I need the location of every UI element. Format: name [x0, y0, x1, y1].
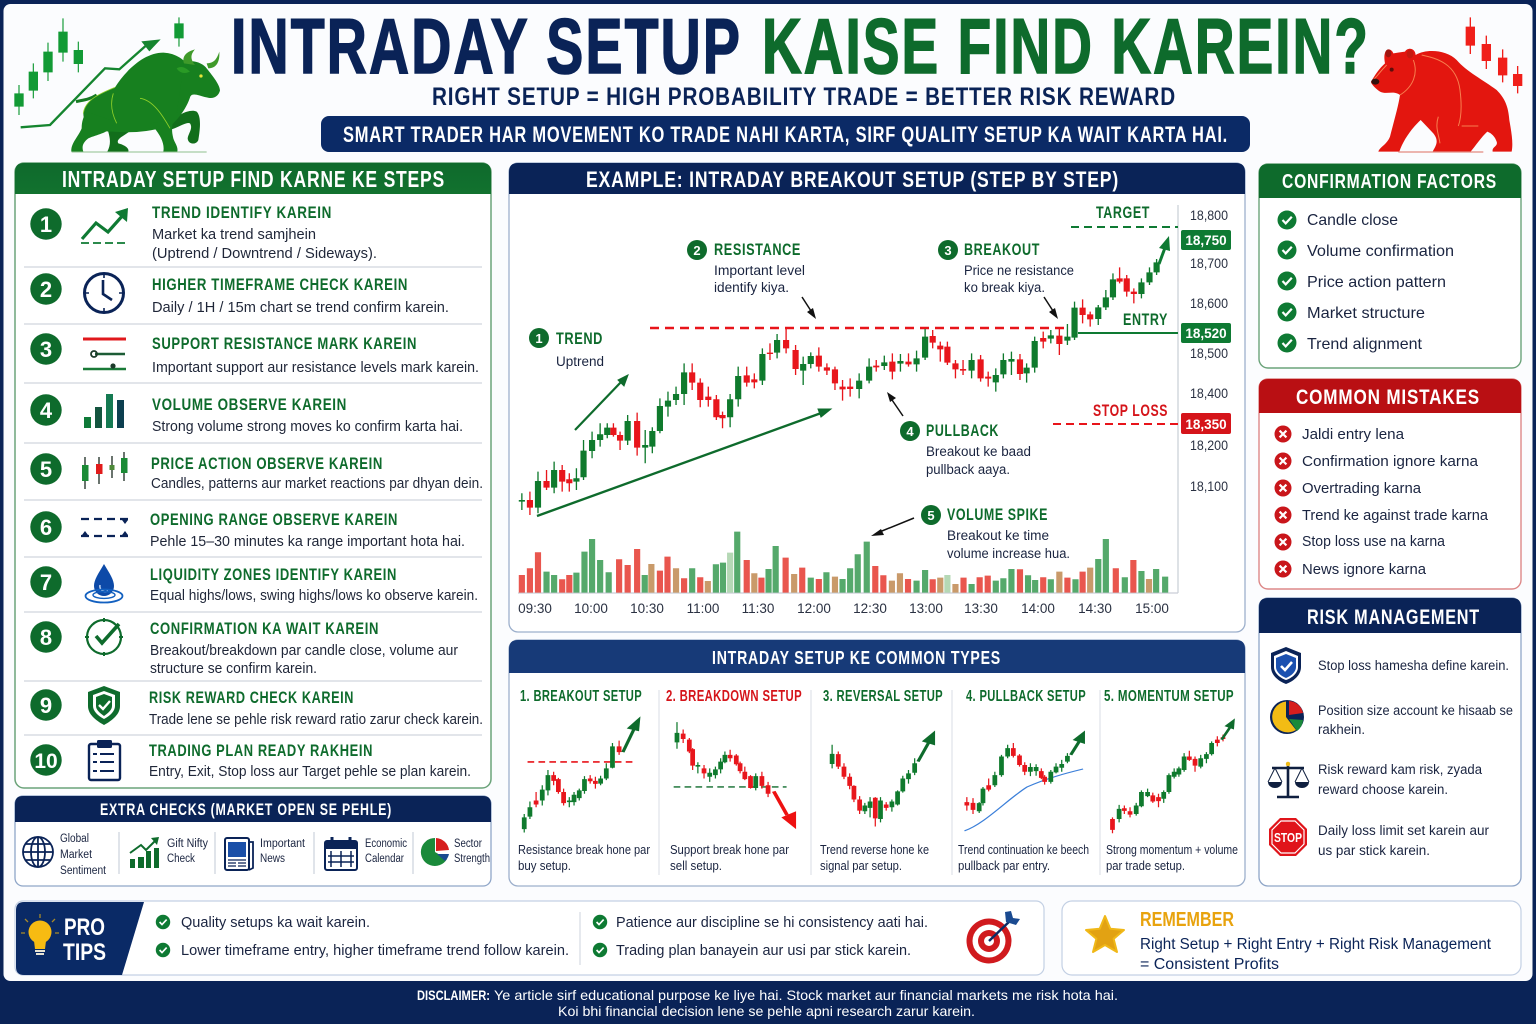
- mini chart: breakdown: [674, 722, 796, 829]
- callout 5: volume spike: 5: [927, 508, 935, 523]
- icon: candlesticks: [82, 452, 128, 489]
- callout 1: trend: [529, 328, 604, 369]
- setup 2: breakdown: 2. BREAKDOWN SETUP: [666, 688, 802, 705]
- setup 1: breakout: buy setup.: [518, 859, 571, 873]
- icon: confirmation check ring: [85, 618, 123, 656]
- list: confirmation items: Trend alignment: [1307, 336, 1423, 353]
- icon: gift nifty chart: [130, 837, 159, 868]
- price axis labels: 18,200: [1190, 438, 1228, 453]
- callout 3: breakout: 3: [944, 243, 952, 258]
- mini chart: pullback: [964, 731, 1085, 831]
- callout 1: trend: 1: [535, 331, 543, 346]
- heading: pro tips: [63, 914, 106, 966]
- step 6: Pehle 15–30 minutes ka range important hota hai.: [150, 534, 465, 550]
- icon: opening range dashes: [81, 519, 128, 536]
- price axis labels: 18,400: [1190, 386, 1228, 401]
- setup 1: breakout: [518, 688, 650, 873]
- step 5: [30, 452, 483, 492]
- text: risk reward: reward choose karein.: [1318, 782, 1448, 797]
- time axis labels: 11:00: [687, 601, 719, 616]
- text: global market sentiment: [60, 833, 107, 877]
- step 3: Important support aur resistance levels mark karein.: [152, 360, 479, 376]
- step 2: [30, 273, 449, 316]
- text: remember message: = Consistent Profits: [1140, 956, 1279, 973]
- text: risk reward: Risk reward kam risk, zyada: [1318, 762, 1482, 777]
- step 6: 6: [40, 515, 52, 540]
- heading: pro tips: PRO: [64, 914, 105, 941]
- price axis labels: 18,100: [1190, 479, 1228, 494]
- price axis labels: 18,800: [1190, 208, 1228, 223]
- time axis labels: 11:30: [742, 601, 774, 616]
- callout 2: resistance: [687, 240, 805, 295]
- step 9: RISK REWARD CHECK KAREIN: [149, 688, 354, 707]
- text: sector strength: [454, 838, 490, 865]
- panel: common setup types: [509, 640, 1245, 886]
- text: sector strength: Sector: [454, 838, 482, 850]
- disclaimer: Koi bhi financial decision lene se pehle apni research zarur karein.: [558, 1003, 975, 1019]
- setup 5: momentum: 5. MOMENTUM SETUP: [1104, 688, 1234, 705]
- icon: globe: [23, 837, 53, 867]
- heading: common types: INTRADAY SETUP KE COMMON TYPES: [712, 648, 1001, 668]
- callout 4: pullback: PULLBACK: [926, 421, 999, 440]
- arrow: to volume spike: [871, 518, 914, 536]
- icon: support and resistance lines: [83, 339, 126, 369]
- list: confirmation items: Price action pattern: [1307, 274, 1446, 291]
- tips list: left: Lower timeframe entry, higher timeframe trend follow karein.: [181, 943, 569, 959]
- step 1: (Uptrend / Downtrend / Sideways).: [152, 246, 377, 262]
- arrow: trend: [575, 375, 628, 430]
- panel: pro tips: [15, 901, 1044, 975]
- tips list: right: [593, 915, 928, 959]
- entry level: [1078, 310, 1231, 343]
- step 1: TREND IDENTIFY KAREIN: [152, 203, 332, 222]
- heading: common mistakes: COMMON MISTAKES: [1296, 386, 1480, 409]
- icon: gold star: [1086, 916, 1124, 952]
- step 7: 7: [40, 570, 52, 595]
- setup 4: pullback: pullback par entry.: [958, 859, 1050, 873]
- step 4: 4: [40, 398, 53, 423]
- setup 4: pullback: 4. PULLBACK SETUP: [966, 688, 1086, 705]
- callout 2: resistance: Important level: [714, 263, 805, 278]
- time axis labels: 15:00: [1135, 601, 1169, 616]
- step 3: SUPPORT RESISTANCE MARK KAREIN: [152, 334, 417, 353]
- icon: balance scale: [1268, 762, 1309, 797]
- candlestick chart: [522, 259, 1157, 515]
- step 6: OPENING RANGE OBSERVE KAREIN: [150, 510, 398, 529]
- icon: position size pie: [1270, 700, 1304, 734]
- list: mistakes: Stop loss use na karna: [1302, 534, 1446, 550]
- step 5: Candles, patterns aur market reactions par dhyan dein.: [151, 476, 483, 492]
- panel: breakout example chart: [509, 163, 1245, 632]
- text: daily loss limit: [1318, 823, 1489, 858]
- icon: target and dart: [966, 911, 1020, 964]
- text: daily loss limit: us par stick karein.: [1318, 843, 1430, 858]
- icon: sector pie: [421, 838, 449, 866]
- step 8: [30, 618, 458, 677]
- list: mistakes: News ignore karna: [1302, 562, 1427, 578]
- callout 4: pullback: 4: [906, 424, 914, 439]
- icon: stop sign: [1269, 818, 1307, 856]
- list: mistakes: Jaldi entry lena: [1302, 427, 1405, 443]
- step 4: VOLUME OBSERVE KAREIN: [152, 395, 347, 414]
- heading: remember: REMEMBER: [1140, 909, 1234, 931]
- step 7: LIQUIDITY ZONES IDENTIFY KAREIN: [150, 565, 397, 584]
- callout 5: volume spike: volume increase hua.: [947, 546, 1070, 561]
- text: economic calendar: [365, 838, 407, 865]
- callout 1: trend: TREND: [556, 329, 603, 348]
- list: mistakes: Confirmation ignore karna: [1302, 454, 1479, 470]
- time axis labels: 13:30: [964, 601, 998, 616]
- callout 3: breakout: [938, 240, 1074, 295]
- icon: water drop: [86, 564, 122, 602]
- setup 5: momentum: Strong momentum + volume: [1106, 843, 1238, 857]
- setup 3: reversal: [820, 688, 943, 873]
- time axis labels: 14:30: [1078, 601, 1112, 616]
- subtitle: RIGHT SETUP = HIGH PROBABILITY TRADE = BETTER RISK REWARD: [432, 83, 1176, 111]
- text: risk reward: [1318, 762, 1482, 797]
- callout 1: trend: Uptrend: [556, 354, 604, 369]
- text: stop loss: Stop loss hamesha define karein.: [1318, 658, 1509, 673]
- step 10: Entry, Exit, Stop loss aur Target pehle se plan karein.: [149, 764, 471, 780]
- list: confirmation items: [1278, 210, 1454, 353]
- text: position size: Position size account ke hisaab se: [1318, 703, 1513, 718]
- step 6: [30, 510, 465, 550]
- step 2: Daily / 1H / 15m chart se trend confirm karein.: [152, 300, 449, 316]
- text: global market sentiment: Sentiment: [60, 865, 107, 877]
- time axis labels: 10:30: [630, 601, 664, 616]
- step 9: 9: [40, 693, 52, 718]
- step 8: 8: [40, 625, 52, 650]
- heading: steps panel: INTRADAY SETUP FIND KARNE KE STEPS: [62, 166, 445, 192]
- callout 2: resistance: RESISTANCE: [714, 240, 801, 259]
- stop loss level: STOP LOSS: [1093, 401, 1168, 420]
- text: global market sentiment: Market: [60, 849, 93, 861]
- setup 3: reversal: Trend reverse hone ke: [820, 843, 929, 857]
- arrow: to target: [1159, 236, 1170, 264]
- step 1: 1: [40, 212, 52, 237]
- setup 4: pullback: [958, 688, 1089, 873]
- step 8: Breakout/breakdown par candle close, volume aur: [150, 643, 458, 659]
- step 4: Strong volume strong moves ko confirm karta hai.: [152, 419, 463, 435]
- setup 3: reversal: 3. REVERSAL SETUP: [823, 688, 943, 705]
- target level: [1071, 203, 1231, 250]
- time axis labels: 13:00: [909, 601, 943, 616]
- icon: green bull with rising candles: [19, 17, 220, 152]
- text: economic calendar: Economic: [365, 838, 407, 850]
- callout 3: breakout: BREAKOUT: [964, 240, 1040, 259]
- callout 2: resistance: identify kiya.: [714, 280, 789, 295]
- setup 5: momentum: par trade setup.: [1106, 859, 1185, 873]
- step 2: HIGHER TIMEFRAME CHECK KAREIN: [152, 275, 408, 294]
- mini chart: reversal: [832, 731, 935, 826]
- step 3: [30, 333, 479, 376]
- icon: volume bars: [84, 394, 124, 428]
- volume bars: [522, 532, 1165, 593]
- entry level: 18,520: [1185, 326, 1227, 341]
- step 9: [30, 686, 483, 728]
- icon: stop sign: STOP: [1274, 830, 1302, 845]
- disclaimer: DISCLAIMER:: [417, 988, 490, 1003]
- time axis labels: 12:00: [797, 601, 831, 616]
- icon: economic calendar: [325, 837, 357, 870]
- tips list: left: Quality setups ka wait karein.: [181, 915, 370, 931]
- time axis labels: 09:30: [518, 601, 552, 616]
- panel: common mistakes: [1259, 379, 1521, 589]
- list: mistakes: Overtrading karna: [1302, 481, 1422, 497]
- panel: remember: [1062, 901, 1521, 975]
- text: gift nifty check: [167, 838, 208, 865]
- setup 2: breakdown: sell setup.: [670, 859, 722, 873]
- text: remember message: [1140, 936, 1492, 973]
- heading: risk management: RISK MANAGEMENT: [1307, 606, 1480, 629]
- step 9: Trade lene se pehle risk reward ratio zarur check karein.: [149, 712, 483, 728]
- price axis labels: 18,500: [1190, 346, 1228, 361]
- step 8: structure se confirm karein.: [150, 661, 317, 677]
- icon: clock: [84, 274, 124, 312]
- step 1: Market ka trend samjhein: [152, 227, 316, 243]
- text: global market sentiment: Global: [60, 833, 89, 845]
- heading: pro tips: TIPS: [63, 939, 106, 966]
- icon: green shield: [88, 686, 120, 725]
- panel: extra checks: [15, 796, 491, 886]
- text: gift nifty check: Check: [167, 853, 195, 865]
- step 5: PRICE ACTION OBSERVE KAREIN: [151, 454, 383, 473]
- icon: uptrend arrow: [81, 208, 128, 243]
- step 3: 3: [40, 337, 52, 362]
- price axis labels: [1190, 208, 1228, 494]
- text: remember message: Right Setup + Right Entry + Right Risk Management: [1140, 936, 1492, 953]
- setup 2: breakdown: Support break hone par: [670, 843, 789, 857]
- list: mistakes: [1274, 426, 1489, 578]
- title: INTRADAY SETUP: [231, 2, 742, 90]
- step 10: 10: [34, 750, 58, 773]
- arrow: to resistance: [802, 297, 816, 319]
- callout 4: pullback: pullback aaya.: [926, 462, 1010, 477]
- setup 2: breakdown: [666, 688, 802, 873]
- text: important news: Important: [260, 838, 306, 850]
- target level: 18,750: [1185, 233, 1227, 248]
- arrow: trendline: [537, 409, 831, 516]
- text: important news: News: [260, 853, 285, 865]
- tips list: left: [156, 915, 569, 959]
- list: mistakes: Trend ke against trade karna: [1302, 508, 1489, 524]
- callout 2: resistance: 2: [693, 243, 701, 258]
- setup 4: pullback: Trend continuation ke beech: [958, 843, 1089, 857]
- tips list: right: Patience aur discipline se hi consistency aati hai.: [616, 915, 928, 931]
- step 10: [30, 740, 471, 780]
- step 1: [30, 203, 377, 262]
- resistance line: [650, 327, 1070, 329]
- icon: newspaper: [225, 838, 253, 870]
- icon: red bear with falling candles: [1371, 17, 1518, 152]
- entry level: ENTRY: [1123, 310, 1168, 329]
- panel: confirmation factors: [1259, 164, 1521, 368]
- setup 1: breakout: Resistance break hone par: [518, 843, 650, 857]
- setup 1: breakout: 1. BREAKOUT SETUP: [520, 688, 642, 705]
- list: confirmation items: Candle close: [1307, 212, 1398, 229]
- step 7: [30, 564, 478, 604]
- disclaimer: Ye article sirf educational purpose ke liye hai. Stock market aur financial markets me risk hota hai.: [494, 987, 1118, 1003]
- mini chart: breakout: [524, 716, 640, 833]
- callout 5: volume spike: [921, 505, 1070, 561]
- stop loss level: 18,350: [1185, 417, 1227, 432]
- callout 3: breakout: Price ne resistance: [964, 263, 1074, 278]
- price axis labels: 18,600: [1190, 296, 1228, 311]
- text: daily loss limit: Daily loss limit set karein aur: [1318, 823, 1489, 838]
- arrow: to pullback: [887, 392, 903, 416]
- step 4: [30, 394, 463, 435]
- callout 3: breakout: ko break kiya.: [964, 280, 1045, 295]
- mini chart: momentum: [1112, 718, 1235, 833]
- list: confirmation items: Volume confirmation: [1307, 243, 1454, 260]
- heading: example panel: EXAMPLE: INTRADAY BREAKOUT SETUP (STEP BY STEP): [586, 167, 1119, 192]
- stop loss level: [1053, 401, 1231, 434]
- setup 3: reversal: signal par setup.: [820, 859, 902, 873]
- list: confirmation items: Market structure: [1307, 305, 1425, 322]
- callout 5: volume spike: VOLUME SPIKE: [947, 505, 1048, 524]
- price axis labels: 18,700: [1190, 256, 1228, 271]
- icon: light bulb: [21, 914, 59, 954]
- step 5: 5: [40, 457, 52, 482]
- callout 4: pullback: Breakout ke baad: [926, 444, 1031, 459]
- step 10: TRADING PLAN READY RAKHEIN: [149, 741, 373, 760]
- icon: clipboard: [89, 740, 120, 780]
- text: position size: [1318, 703, 1513, 737]
- banner: SMART TRADER HAR MOVEMENT KO TRADE NAHI KARTA, SIRF QUALITY SETUP KA WAIT KARTA HAI.: [343, 122, 1228, 147]
- panel: intraday setup steps: [15, 163, 491, 788]
- step 2: 2: [40, 277, 52, 302]
- title: [231, 2, 1370, 90]
- tips list: right: Trading plan banayein aur usi par stick karein.: [616, 943, 911, 959]
- icon: blue shield: [1271, 647, 1301, 684]
- disclaimer: [417, 987, 1118, 1019]
- time axis labels: 12:30: [853, 601, 887, 616]
- callout 5: volume spike: Breakout ke time: [947, 528, 1049, 543]
- arrow: to breakout: [1044, 297, 1058, 319]
- time axis labels: [518, 601, 1169, 616]
- time axis labels: 10:00: [574, 601, 608, 616]
- banner: [321, 116, 1250, 152]
- step 8: CONFIRMATION KA WAIT KAREIN: [150, 619, 379, 638]
- time axis labels: 14:00: [1021, 601, 1055, 616]
- callout 4: pullback: [900, 421, 1031, 477]
- heading: extra checks: EXTRA CHECKS (MARKET OPEN SE PEHLE): [100, 801, 392, 819]
- text: important news: [260, 838, 306, 865]
- text: economic calendar: Calendar: [365, 853, 404, 865]
- text: gift nifty check: Gift Nifty: [167, 838, 208, 850]
- panel: risk management: [1259, 598, 1521, 886]
- text: position size: rakhein.: [1318, 722, 1365, 737]
- text: sector strength: Strength: [454, 853, 490, 865]
- target level: TARGET: [1096, 203, 1150, 222]
- step 7: Equal highs/lows, swing highs/lows ko observe karein.: [150, 588, 478, 604]
- setup 5: momentum: [1104, 688, 1238, 873]
